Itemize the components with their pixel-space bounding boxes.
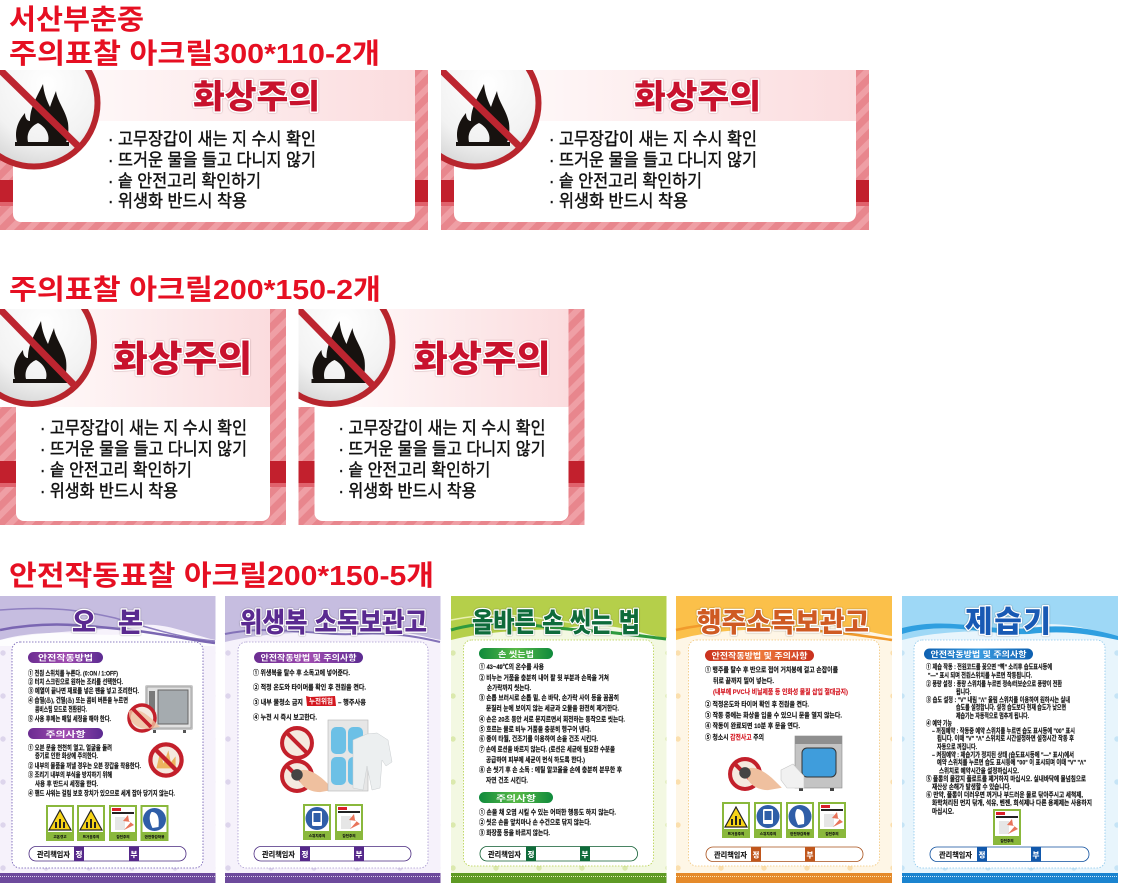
sign: 200x150 second [268,280,584,525]
manager box: 정 [302,849,309,859]
heading: 주의표찰 200*150: 주의표찰 아크릴200*150-2개 [9,274,381,305]
cautions: ④ 핸드 샤워는 걸림 보호 장치가 있으므로 세게 잡아 당기지 않는다. [28,788,175,798]
manager box: 부 [1033,850,1040,860]
icon: no water [282,728,312,758]
content panel [464,640,654,866]
instructions: 누전위험 [309,696,333,706]
manager box [29,846,186,861]
instructions: 문질러 눈에 보이지 않는 세균과 오물을 완전히 제거한다. [486,704,619,712]
manager box: 정 [76,849,83,859]
content panel [688,640,880,866]
instructions: ⑤ 플롱의 물감지 플로트를 제거하지 마십시오. 실내바닥에 물넘침으로 [926,774,1086,783]
bottom band [0,873,216,883]
instructions: 습도를 설정합니다. 설정 습도보다 현재 습도가 낮으면 [956,702,1066,712]
image: oven [145,685,193,733]
safety signs: 감전주의 [116,834,130,839]
cautions: ① 오븐 문을 천천히 열고, 얼굴을 돌려 [28,743,112,752]
manager box: 부 [582,850,589,859]
sign: 300x110 second [412,40,869,230]
instructions: ② 적정 온도와 타이머를 확인 후 전원을 켠다. [253,682,366,692]
instructions: ① 위생복을 탈수 후 소독고에 넣어준다. [253,668,350,677]
sign list: · 솥 안전고리 확인하기 [108,171,261,191]
manager box: 정 [753,850,760,860]
instructions: ④ 손은 20초 동안 서로 문지르면서 회전하는 동작으로 씻는다. [479,714,625,724]
sign title: 화상주의 [414,338,550,379]
instructions: ⑥ 종이 타월, 건조기를 이용하여 손을 건조 시킨다. [479,734,598,743]
safety signs: 스위치주의 [760,831,776,836]
poster title: 오 [72,608,96,638]
sign title: 화상주의 [193,78,320,115]
manager box: 관리책임자 [37,849,70,859]
manager box: 정 [528,849,535,859]
content panel [914,640,1105,868]
sign list: · 고무장갑이 새는 지 수시 확인 [549,129,757,149]
instructions: ⑥ 만약, 플롱이 더러우면 꺼거나 부드러운 물로 닦아주시고 세척제, [926,790,1083,799]
sign list: · 뜨거운 물을 들고 다니지 않기 [338,439,546,459]
poster title: 본 [118,608,143,638]
instructions: 뒤로 끝까지 밀어 넣는다. [713,676,774,685]
safety signs: 안전장갑착용 [790,831,811,836]
sign title: 화상주의 [113,338,252,379]
safety signs: 안전장갑착용 [145,834,165,839]
cautions [28,743,175,798]
poster title: 위생복 소독보관고 [240,608,427,638]
instructions: ③ 습도 설정 : "V" 내림 "Λ" 올림 스위치를 이용하여 원하시는 실내 [926,695,1070,704]
instructions: 자동으로 꺼집니다. [937,742,977,751]
safety sign: 감전주의 [1000,838,1014,843]
sign list [549,129,757,211]
instructions: ⑤ 사용 후에는 매일 세정을 해야 한다. [28,714,111,723]
pill: 안전작동방법 및 주의사항 [260,652,357,662]
image: sterilizer and gown [328,720,392,791]
manager box: 관리책임자 [488,849,521,859]
manager box: 관리책임자 [714,850,747,860]
instructions: 됩니다. [956,687,971,696]
cautions [479,808,616,837]
manager box: 정 [979,850,986,860]
sign list: · 뜨거운 물을 들고 다니지 않기 [40,439,247,459]
icon: no touch [129,705,160,731]
manager box [480,846,638,861]
safety signs [46,805,168,841]
safety signs: 감전주의 [342,833,356,838]
pill: 손 씻는법: 손 씻는법 [498,649,534,659]
sign list [40,418,247,501]
cautions: 사용 후 반드시 세정을 한다. [35,779,98,788]
instructions: ④ 습열(♨), 건열(♨) 또는 콤비 버튼을 누르면 [28,696,128,704]
pill [254,652,363,663]
pill: 안전작동방법: 안전작동방법 [38,652,93,662]
instructions: ② 풍량 설정 : 풍량 스위치를 누르면 정속/터보순으로 풍량이 전환 [926,679,1062,688]
manager box: 부 [131,850,138,859]
safety signs: 뜨거움주의 [83,834,99,839]
bottom band [225,873,440,883]
instructions: "—" 표시 되며 전원스위치를 누르면 작동됩니다. [928,670,1032,680]
safety signs [722,802,846,838]
poster title: 행주소독보관고 [697,608,869,638]
bottom band [902,873,1118,883]
content panel [12,642,203,868]
bottom band [451,873,666,883]
poster title: 올바른 손 씻는 법 [472,608,640,638]
manager box: 관리책임자 [262,849,295,859]
manager box [706,847,863,862]
safety signs: 감전주의 [825,831,839,836]
pill: 주의사항: 주의사항 [496,793,537,803]
content panel [238,642,428,868]
safety signs: 뜨거움주의 [728,831,744,836]
poster: 제습기 [902,596,1118,883]
cautions: ② 내부의 물품을 꺼낼 경우는 오븐 장갑을 착용한다. [28,761,141,770]
instructions: 마십시오. [932,806,954,816]
instructions: ③ 손톱 브러시로 손톱 밑, 손 바닥, 손가락 사이 등을 꼼꼼히 [479,693,619,702]
icon: no plug [730,759,782,790]
instructions: ⑤ 청소시 감전사고 주의 [705,732,764,742]
instructions [479,662,625,784]
image: towels and sterilizer [781,736,842,791]
manager box: 부 [356,850,363,859]
instructions: 콤비스팀 모드로 전환된다. [35,704,87,714]
instructions: ① 행주를 탈수 후 반으로 접어 거치봉에 걸고 손잡이를 [705,665,838,674]
pill: 안전작동방법 및 주의사항 [930,649,1027,659]
heading: 안전작동표찰: 안전작동표찰 아크릴200*150-5개 [9,560,434,591]
instructions: 스위치로 예약시간을 설정하십시오. [939,766,1019,775]
instructions: – 켜짐예약 : 제습기가 정지된 상태 (습도표시등에 "—" 표시)에서 [932,750,1074,759]
instructions: ④ 예약 기능 [926,718,952,728]
instructions: 공급하여 피부에 세균이 번식 하도록 한다.) [486,755,585,764]
cautions: 증기로 인한 화상에 주의한다. [35,751,98,760]
instructions: ② 적정온도와 타이머 확인 후 전원을 켠다. [705,700,809,708]
instructions: ⑤ 흐르는 물로 비누 거품을 충분히 헹구어 낸다. [479,724,591,734]
safety signs [303,804,363,840]
safety sign [993,809,1021,845]
cautions: ③ 화장품 등을 바르지 않는다. [479,828,550,837]
instructions: ④ 작동이 완료되면 10분 후 문을 연다. [705,721,800,730]
poster: 행주소독보관고 [676,596,892,883]
pill: 주의사항 [479,792,553,803]
sign list: · 고무장갑이 새는 지 수시 확인 [338,418,546,438]
heading: 주의표찰 300*110: 주의표찰 아크릴300*110-2개 [9,38,380,69]
instructions: ⑧ 손 씻기 후 손 소독 : 에틸 알코올을 손에 충분히 분무한 후 [479,765,622,774]
cautions: ① 손을 채 오염 시킬 수 있는 어떠한 행동도 하지 않는다. [479,808,616,816]
instructions: 예약 스위치를 누르면 습도 표시등에 "00" 이 표시되며 이때 "V" "Λ" [937,758,1086,766]
instructions: 화학처리된 먼지 닦개, 석유, 벤젠, 희석제나 다른 용제제는 사용하지 [932,798,1092,807]
instructions: – 행주사용 [338,698,366,706]
sign title: 화상주의 [634,78,761,115]
instructions [253,668,366,722]
instructions: ③ 작동 중에는 화상을 입을 수 있으니 문을 열지 않는다. [705,710,842,720]
pill: 안전작동방법 및 주의사항 [712,650,808,660]
sign list: · 위생화 반드시 착용 [338,481,476,501]
instructions: ① 제습 작동 : 전원코드를 꽂으면 "삑" 소리후 습도표시등에 [926,662,1052,671]
sign list: · 뜨거운 물을 들고 다니지 않기 [108,150,316,170]
instructions: ① 전원 스위치를 누른다. (0:ON / 1:OFF) [28,668,118,678]
icon: no fire [150,744,182,776]
instructions: ② 비누는 거품을 충분히 내어 팔 윗 부분과 손목을 거쳐 [479,673,609,682]
heading: 서산부춘중: 서산부춘중 [9,4,144,35]
manager box [930,847,1089,862]
poster: 오븐 [0,596,216,883]
sign list: · 위생화 반드시 착용 [40,481,178,501]
sign list: · 위생화 반드시 착용 [549,191,688,211]
instructions: ⑦ 손에 로션을 바르지 않는다. (로션은 세균에 필요한 수분을 [479,744,615,754]
instructions [705,665,848,742]
sign list: · 솥 안전고리 확인하기 [40,460,192,480]
pill: 주의사항: 주의사항 [46,729,86,739]
sign list [108,129,316,211]
sign: 300x110 first [0,40,428,230]
sign list: · 뜨거운 물을 들고 다니지 않기 [549,150,757,170]
instructions: 됩니다. 이때 "V" "Λ" 스위치로 시간설정하면 설정시간 작동 후 [937,734,1074,742]
sign list: · 솥 안전고리 확인하기 [338,460,490,480]
poster: 위생복 소독보관고 [225,596,440,883]
instructions: (내부에 PVC나 비닐제품 등 인화성 물질 삽입 절대금지) [713,687,848,696]
pill [924,648,1033,660]
instructions [28,668,139,723]
instructions: 재산상 손해가 발생할 수 있습니다. [932,782,1011,791]
instructions: – 꺼짐예약 : 작동중 예약 스위치를 누르면 습도 표시등에 "00" 표시 [932,726,1075,735]
safety signs: 스위치주의 [309,833,325,838]
instructions: ③ 내부 물청소 금지 [253,698,303,706]
instructions: ④ 누전 시 즉시 보고한다. [253,712,317,722]
icon: no plug [282,761,334,792]
poster: 올바른 손 씻는 법 [451,596,666,883]
cautions: ② 씻은 손을 앞치마나 손 수건으로 닦지 않는다. [479,818,591,826]
safety signs: 고온경고 [53,834,67,839]
sign list: · 솥 안전고리 확인하기 [549,171,702,191]
manager box [254,846,411,861]
sign: 200x150 first [0,280,286,525]
poster title: 제습기 [965,606,1051,639]
instructions: 제습기는 자동적으로 멈추게 됩니다. [956,711,1029,720]
sign list [338,418,546,501]
sign list: · 고무장갑이 새는 지 수시 확인 [108,129,316,149]
bottom band [676,873,892,883]
instructions: ① 43~49℃의 온수를 사용 [479,662,544,671]
pill: 주의사항 [28,728,103,739]
manager box: 관리책임자 [939,850,972,860]
pill: 손 씻는법 [479,648,553,659]
instructions: 자연 건조 시킨다. [486,776,528,784]
pill [705,650,814,661]
sign list: · 고무장갑이 새는 지 수시 확인 [40,418,247,438]
instructions [926,662,1092,816]
pill: 안전작동방법 [28,652,103,663]
manager box: 부 [807,850,814,860]
sign list: · 위생화 반드시 착용 [108,191,247,211]
instructions: ② 터치 스크린으로 원하는 조리를 선택한다. [28,677,123,686]
poster title [72,608,143,638]
instructions: 손가락까지 씻는다. [487,683,531,692]
instructions: ③ 예열이 끝나면 재료를 넣은 팬을 넣고 조리한다. [28,686,139,695]
cautions: ③ 조리기 내부의 부식을 방지하기 위해 [28,770,112,779]
